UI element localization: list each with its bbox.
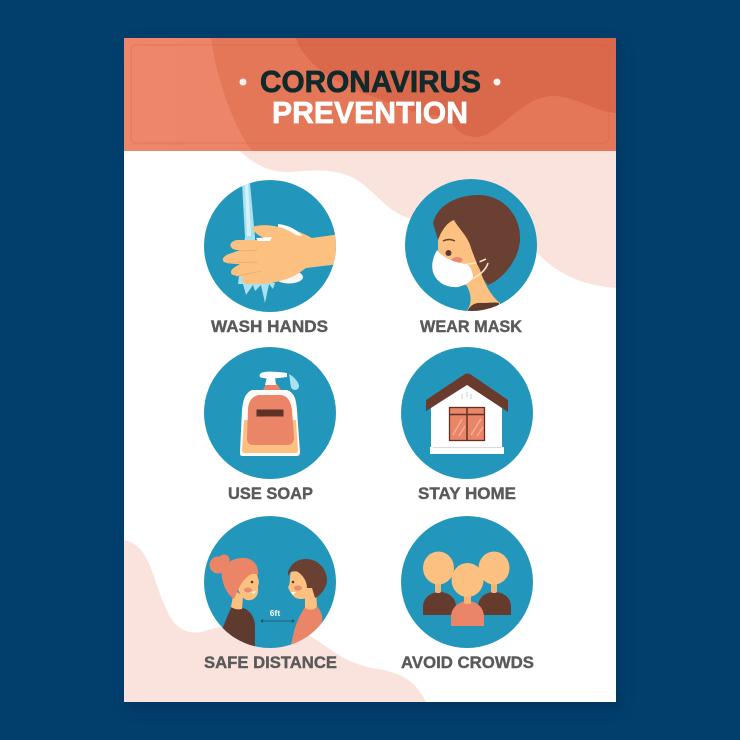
panel: wear mask: [405, 179, 537, 336]
background blob: bottom left: [124, 540, 426, 702]
title line 2: PREVENTION: [272, 95, 468, 130]
poster shadow: [128, 44, 620, 708]
panel: avoid crowds: [401, 516, 534, 672]
icon: three people: [401, 516, 533, 648]
poster: [124, 38, 616, 702]
window: [450, 408, 484, 440]
background blob: top right: [240, 151, 616, 288]
header band: [124, 38, 616, 151]
icon: house: [401, 347, 533, 479]
panel: safe distance: [204, 516, 337, 672]
title: [240, 64, 500, 130]
icon: two people six feet apart: [204, 516, 336, 650]
icon: soap bottle: [204, 347, 336, 479]
title bullet left: [240, 78, 246, 86]
distance label: 6ft: [270, 608, 280, 618]
title bullet right: [494, 78, 500, 86]
label: wash hands: WASH HANDS: [211, 317, 328, 336]
woman: [210, 554, 259, 650]
panel: wash hands: [204, 180, 340, 336]
label: avoid crowds: AVOID CROWDS: [401, 653, 534, 672]
label: wear mask: WEAR MASK: [420, 317, 523, 336]
label: use soap: USE SOAP: [228, 484, 313, 503]
panel: stay home: [401, 347, 533, 503]
distance arrow: [261, 620, 294, 622]
panel: use soap: [204, 347, 336, 503]
icon: person wearing mask: [405, 179, 537, 312]
label: safe distance: SAFE DISTANCE: [204, 653, 337, 672]
label: stay home: STAY HOME: [418, 484, 516, 503]
title line 1: CORONAVIRUS: [260, 64, 481, 99]
man: [288, 559, 327, 650]
icon: wash hands: [204, 180, 340, 312]
